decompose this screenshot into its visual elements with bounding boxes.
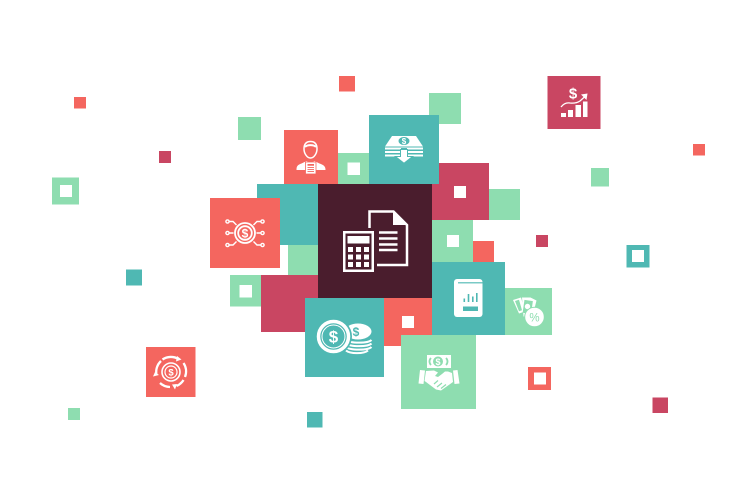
- icon: dollar coin with connection nodes: $: [242, 226, 249, 240]
- scattered square: teal left: [126, 270, 142, 286]
- icon: dollar, rising arrow and bars: $: [569, 86, 578, 102]
- tile: money stack with down arrow: [369, 115, 439, 184]
- scattered ring: green left: [52, 178, 79, 204]
- tile: coral rotating dollar: [146, 347, 196, 397]
- teal square behind left tile: [257, 184, 318, 245]
- tile: green percent: [505, 288, 552, 335]
- tile: green handshake: [401, 335, 476, 409]
- icon: coin stack: $: [353, 325, 360, 339]
- tile: accountant icon: [284, 130, 338, 184]
- scattered square: teal bottom: [307, 412, 322, 428]
- icon: banknotes with percent badge: %: [529, 312, 540, 324]
- scattered square: crimson right: [536, 235, 548, 247]
- scattered square: green upper left: [238, 117, 261, 140]
- scattered square: crimson lower right: [652, 398, 668, 413]
- scattered ring: coral lower right: [528, 367, 551, 390]
- tile: crimson growth chart: [548, 76, 600, 129]
- green ring tile, right of centre: [432, 220, 473, 262]
- tile: teal coins: [305, 298, 384, 377]
- coral ring tile, below centre: [384, 298, 432, 346]
- crimson ring tile, upper right: [432, 163, 489, 220]
- green ring tile, lower left: [230, 275, 261, 306]
- icon: accountant with calculator: [296, 142, 326, 174]
- crimson square, lower left of centre: [261, 275, 318, 332]
- scattered square: coral far left: [74, 97, 86, 108]
- scattered square: crimson left: [159, 151, 171, 163]
- scattered square: green lower left: [68, 408, 80, 420]
- green ring tile, above centre: [338, 153, 370, 184]
- icon: coin stack: [315, 318, 372, 355]
- green square behind top tile: [429, 93, 461, 124]
- icon: calculator: [343, 231, 374, 272]
- tile: teal report book: [432, 262, 505, 335]
- scattered square: coral top: [339, 76, 355, 92]
- coral small square, right of centre: [473, 241, 494, 262]
- tile: central calculator and document: [318, 184, 432, 298]
- icon: document: [370, 212, 407, 265]
- icon: book with bar chart: [454, 279, 482, 317]
- icon: banknote above handshake: $: [435, 357, 441, 367]
- icon: dollar with circular arrows: $: [168, 368, 174, 378]
- scattered square: coral far right: [693, 144, 705, 156]
- icon: banknotes and arrow: $: [402, 137, 407, 146]
- scattered square: green right: [591, 168, 609, 186]
- green square under teal block: [288, 245, 318, 275]
- green square beside crimson tile: [489, 189, 520, 220]
- icon: coin stack: $: [329, 328, 339, 346]
- scattered ring: teal right: [626, 245, 650, 268]
- tile: coral network dollar: [210, 198, 280, 268]
